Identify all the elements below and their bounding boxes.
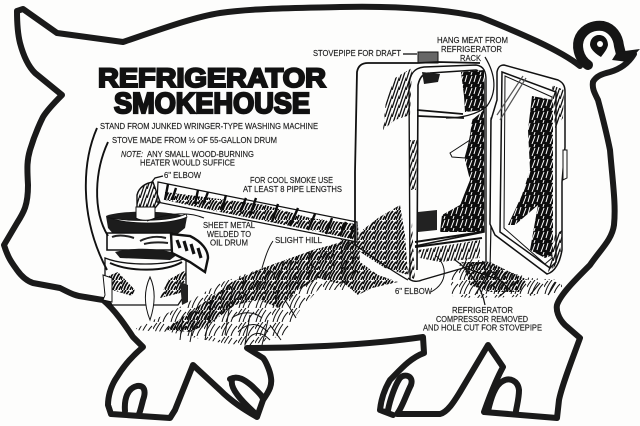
drum top (106, 212, 187, 236)
label: hang meat (437, 36, 508, 63)
pig ear swirl (578, 26, 640, 65)
label: compressor: AND HOLE CUT FOR STOVEPIPE (423, 324, 542, 332)
label: cool smoke (243, 176, 342, 194)
label: note: NOTE: (121, 150, 143, 159)
label: sheet metal (203, 221, 256, 248)
lower drum (105, 258, 186, 305)
label: cool smoke: FOR COOL SMOKE USE (250, 176, 333, 185)
refrigerator dark feathering (357, 68, 484, 280)
arrow: stovepipe for draft (403, 53, 417, 55)
label: hang meat: REFRIGERATOR (441, 45, 502, 54)
label: sheet metal: SHEET METAL (203, 221, 256, 230)
stove with elbow, drum and door (103, 182, 208, 320)
label: sheet metal: OIL DRUM (210, 238, 248, 248)
smoke pipe (157, 182, 357, 242)
arrow: compressor (455, 260, 485, 305)
label: note (121, 150, 254, 168)
label: slight hill: SLIGHT HILL (275, 236, 323, 245)
door (171, 234, 208, 272)
refrigerator door (490, 65, 567, 274)
arrow: stand (86, 128, 107, 270)
arrow: stove (97, 142, 108, 236)
front frame (408, 65, 486, 281)
arrow: slight hill (262, 241, 273, 268)
arrow: lower elbow (431, 255, 444, 292)
arrow: elbow at stove (151, 176, 163, 183)
label: note: ANY SMALL WOOD-BURNING (147, 150, 254, 159)
label: hang meat: RACK (460, 54, 482, 63)
title: SMOKEHOUSE (114, 88, 310, 120)
feet (103, 275, 112, 302)
label: sheet metal: WELDED TO (207, 230, 251, 239)
shelves (417, 110, 464, 118)
label: stove: STOVE MADE FROM ½ OF 55-GALLON DRUM (112, 136, 277, 145)
title (98, 63, 326, 120)
label: compressor: COMPRESSOR REMOVED (436, 315, 528, 324)
label: cool smoke: AT LEAST 8 PIPE LENGTHS (243, 185, 342, 194)
grass: slight hill (133, 238, 358, 346)
label: compressor (423, 306, 542, 332)
middle band (107, 233, 172, 250)
line: sheet metal (147, 214, 204, 221)
label: elbow at stove: 6" ELBOW (164, 171, 201, 180)
label: stand: STAND FROM JUNKED WRINGER-TYPE WASHING MACHINE (100, 122, 318, 131)
title: REFRIGERATOR (98, 63, 326, 93)
label: note: HEATER WOULD SUFFICE (140, 158, 235, 168)
label: lower elbow: 6" ELBOW (395, 287, 432, 296)
grass: around refrigerator (340, 222, 562, 298)
label: compressor: REFRIGERATOR (452, 306, 513, 315)
stovepipe for draft (418, 52, 438, 63)
label: stovepipe for draft: STOVEPIPE FOR DRAFT (313, 49, 401, 58)
label: hang meat: HANG MEAT FROM (437, 36, 508, 45)
collar (136, 207, 155, 220)
elbow (137, 182, 160, 208)
arrow: hang meat (446, 57, 494, 118)
refrigerator body (355, 62, 496, 281)
